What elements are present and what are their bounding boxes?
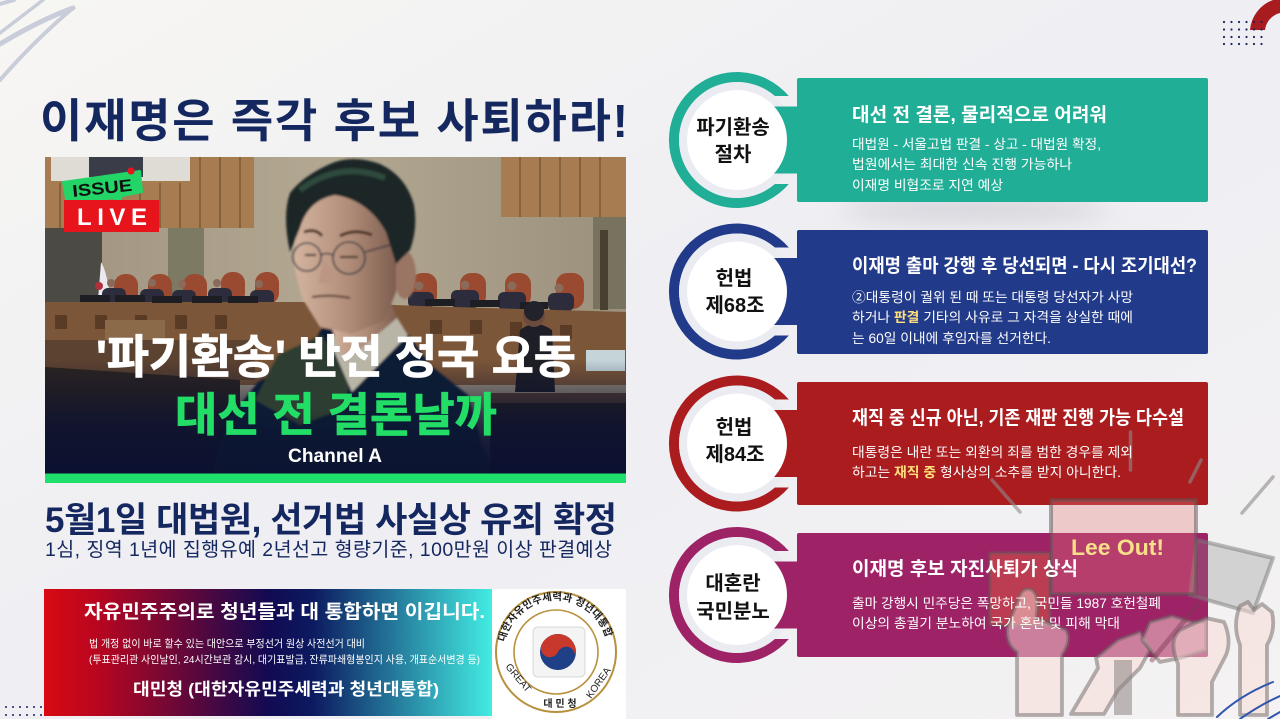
circle label: 헌법 <box>716 267 752 290</box>
badge: issue live <box>63 167 159 232</box>
card heading: 이재명 출마 강행 후 당선되면 - 다시 조기대선? <box>852 255 1197 277</box>
panel: 헌법 제84조 <box>669 376 1208 512</box>
thumbnail subheadline: 대선 전 결론날까 <box>175 389 497 441</box>
icon ring: red <box>669 376 798 512</box>
circle label <box>705 416 765 466</box>
card body: 대혼란 국민분노: 출마 강행시 민주당은 폭망하고, 국민들 1987 호헌철폐 <box>852 596 1161 611</box>
banner detail line two: (투표관리관 사인날인, 24시간보관 감시, 대기표발급, 잔류파쇄형봉인지 사용, 개표순서변경 등) <box>89 653 480 666</box>
arm 1 <box>1007 589 1068 715</box>
dark lower overlay <box>212 421 490 474</box>
panel: 파기환송 절차 <box>669 72 1208 208</box>
circle label <box>696 116 770 166</box>
circle label: 제68조 <box>705 294 765 317</box>
panel: 대혼란 국민분노 <box>669 527 1208 663</box>
circle label: 파기환송 <box>696 116 770 139</box>
rays <box>992 432 1273 513</box>
arms and fists <box>1007 589 1273 715</box>
title: 이재명은 즉각 후보 사퇴하라! <box>40 95 628 147</box>
logo panel: great korea emblem <box>492 589 626 719</box>
banner detail line one: 법 개정 없이 바로 할수 있는 대안으로 부정선거 원상 사전선거 대비 <box>89 637 365 650</box>
logo panel: great korea emblem: GREAT <box>503 662 533 695</box>
sign: right grey <box>1190 540 1273 613</box>
circle label <box>696 572 770 623</box>
headline: ruling: 5월1일 대법원, 선거법 사실상 유죄 확정 <box>45 501 617 540</box>
card heading: 헌법 제84조: 재직 중 신규 아닌, 기존 재판 진행 가능 다수설 <box>852 407 1184 429</box>
arm 3 fist <box>1142 616 1206 662</box>
card body: 하거나 판결 기타의 사유로 그 자격을 상실한 때에 <box>852 310 1133 325</box>
arm 5 <box>1236 602 1273 715</box>
icon ring: magenta <box>669 527 798 663</box>
badge: issue live: ISSUE <box>71 176 133 201</box>
circle label: 대혼란 <box>705 572 761 595</box>
decorative corner arc and dots top right <box>1223 0 1280 45</box>
icon ring: navy <box>669 224 798 360</box>
icon: taegeuk <box>534 628 582 676</box>
card body: 는 60일 이내에 후임자를 선거한다. <box>852 331 1051 346</box>
card shadow <box>840 198 1110 222</box>
card body: 헌법 제84조: 하고는 재직 중 형사상의 소추를 받지 아니한다. <box>852 465 1121 480</box>
card body: 이재명 비협조로 지연 예상 <box>852 178 1003 193</box>
sign: left red <box>990 553 1050 625</box>
logo panel: great korea emblem: 대 민 청 <box>543 697 577 710</box>
judges <box>102 288 574 311</box>
panel: 헌법 제68조 <box>669 224 1208 360</box>
card body: ②대통령이 궐위 된 때 또는 대통령 당선자가 사망 <box>852 290 1133 305</box>
card heading: 대선 전 결론, 물리적으로 어려워 <box>852 104 1107 126</box>
chairs <box>114 272 584 309</box>
card body: 헌법 제84조 <box>852 445 1133 480</box>
dark vignette at base <box>45 363 626 474</box>
banner heading: 자유민주주의로 청년들과 대 통합하면 이깁니다. <box>84 601 485 623</box>
card body: 대혼란 국민분노: 이상의 총궐기 분노하여 국가 혼란 및 피해 막대 <box>852 616 1120 631</box>
green bar <box>45 474 626 483</box>
arm 2 <box>1071 632 1150 714</box>
badge: issue live: LIVE <box>77 204 147 231</box>
subheadline: sentence: 1심, 징역 1년에 집행유예 2년선고 형량기준, 100만원 이상 판결예상 <box>45 539 612 561</box>
clerk standing right <box>515 324 555 392</box>
banner organisation: 대민청 (대한자유민주세력과 청년대통합) <box>133 680 439 699</box>
circle label: 국민분노 <box>696 600 770 623</box>
circle label: 제84조 <box>705 443 765 466</box>
banner panel <box>44 589 492 716</box>
circle label <box>705 267 765 317</box>
arm 4 <box>1173 618 1229 715</box>
icon ring: teal <box>669 72 798 208</box>
card heading: 대혼란 국민분노: 이재명 후보 자진사퇴가 상식 <box>852 558 1078 580</box>
sign: main pink <box>1051 500 1196 594</box>
flag <box>98 262 109 295</box>
sign text: Lee Out: Lee Out! <box>1071 535 1164 560</box>
logo panel: great korea emblem: KOREA <box>584 665 614 701</box>
portrait of man <box>230 158 482 452</box>
courtroom scene <box>45 157 626 483</box>
card body: 법원에서는 최대한 신속 진행 가능하나 <box>852 157 1072 172</box>
circle label: 절차 <box>715 143 751 166</box>
news thumbnail panel <box>45 157 626 483</box>
channel logo: Channel A <box>288 446 382 467</box>
decorative dots bottom left <box>5 706 42 716</box>
card body <box>852 290 1133 346</box>
card body: 대법원 - 서울고법 판결 - 상고 - 대법원 확정, <box>852 137 1101 152</box>
decorative blue scribble bottom right <box>1217 682 1280 719</box>
card body: 헌법 제84조: 대통령은 내란 또는 외환의 죄를 범한 경우를 제외 <box>852 445 1133 460</box>
card body <box>852 137 1101 193</box>
protest illustration <box>990 432 1273 715</box>
bench <box>45 302 626 385</box>
thumbnail headline: '파기환송' 반전 정국 요동 <box>96 331 576 383</box>
circle label: 헌법 <box>716 416 752 439</box>
card body: 대혼란 국민분노 <box>852 596 1161 631</box>
logo panel: great korea emblem: 대한자유민주세력과 청년대통합 <box>498 591 614 641</box>
decorative scribble top left <box>0 0 73 80</box>
